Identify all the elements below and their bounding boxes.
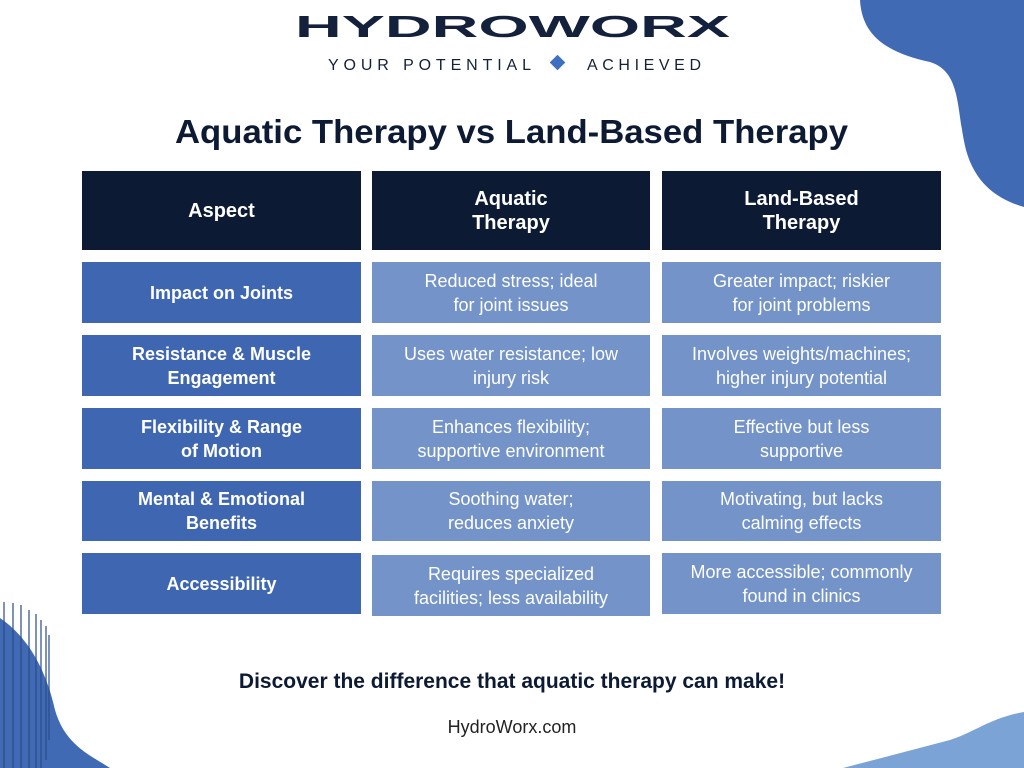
table: Accessibility [166, 574, 277, 594]
table: Enhances flexibility; [432, 416, 590, 436]
table: Aquatic [474, 188, 548, 210]
table: Benefits [186, 513, 257, 533]
table: higher injury potential [716, 368, 887, 388]
table: calming effects [742, 513, 861, 533]
table: reduces anxiety [448, 513, 574, 533]
title: Aquatic Therapy vs Land-Based Therapy [175, 113, 849, 150]
logo: HYDROWORX [295, 9, 731, 44]
table: Therapy [472, 212, 550, 234]
table: Mental & Emotional [138, 489, 305, 509]
table: Engagement [167, 368, 276, 388]
table: Involves weights/machines; [692, 344, 911, 364]
table: supportive environment [417, 440, 605, 460]
table: Uses water resistance; low [404, 344, 618, 364]
table: for joint issues [453, 294, 569, 314]
table: found in clinics [742, 586, 861, 606]
table: Therapy [763, 212, 840, 234]
table: of Motion [181, 440, 262, 460]
table: Land-Based [744, 188, 859, 210]
table: Motivating, but lacks [720, 489, 883, 509]
logo [295, 9, 731, 74]
table: Impact on Joints [150, 282, 293, 302]
website: HydroWorx.com [448, 717, 576, 737]
table: Reduced stress; ideal [424, 270, 598, 290]
table [82, 171, 941, 616]
logo: YOUR POTENTIAL [328, 57, 531, 74]
table: supportive [760, 440, 843, 460]
table: More accessible; commonly [690, 562, 913, 582]
table: Greater impact; riskier [713, 270, 890, 290]
table: Soothing water; [448, 489, 574, 509]
table: Aspect [188, 200, 255, 222]
table: for joint problems [732, 294, 871, 314]
table: Requires specialized [428, 564, 594, 584]
table: Flexibility & Range [141, 416, 302, 436]
table: Resistance & Muscle [132, 344, 311, 364]
tagline: Discover the difference that aquatic therapy can make! [239, 670, 785, 693]
table: Effective but less [734, 416, 869, 436]
logo: ACHIEVED [587, 57, 701, 74]
table: facilities; less availability [414, 588, 608, 608]
table: injury risk [473, 368, 549, 388]
